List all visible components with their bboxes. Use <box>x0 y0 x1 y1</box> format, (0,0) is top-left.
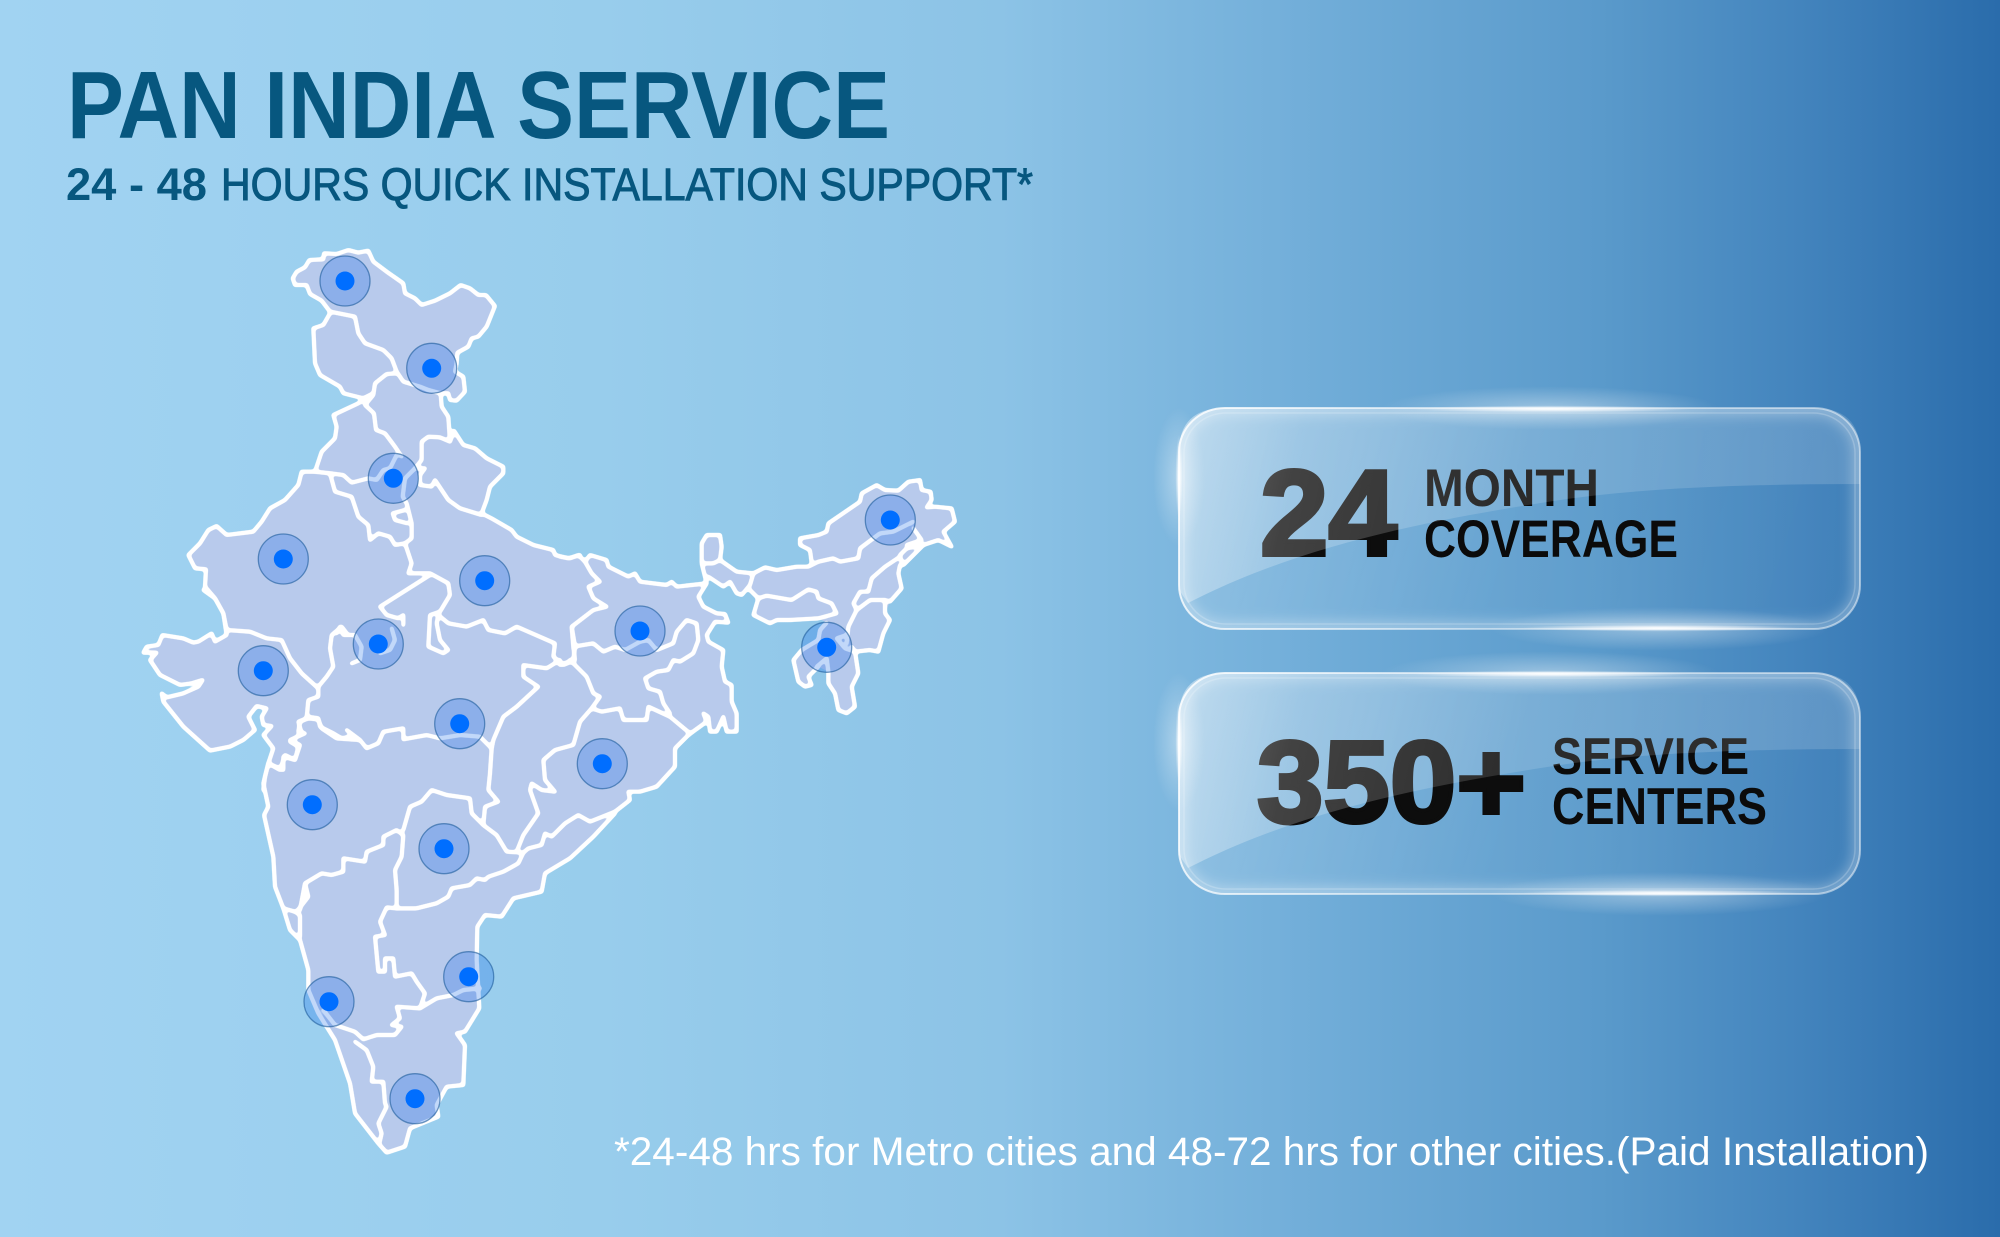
subtitle: HOURS QUICK INSTALLATION SUPPORT* <box>221 159 1033 210</box>
light flares <box>1153 651 1830 916</box>
state fills <box>143 250 955 1153</box>
title: PAN INDIA SERVICE <box>67 52 890 159</box>
inner border <box>1184 413 1855 624</box>
marker: Telangana <box>419 824 469 874</box>
centers label: SERVICE <box>1552 728 1749 786</box>
panel border <box>1179 673 1860 894</box>
marker: Chennai <box>444 952 494 1002</box>
card: 350+ service centers <box>1153 651 1860 916</box>
centers label: CENTERS <box>1552 778 1767 836</box>
marker: Arunachal <box>865 495 915 545</box>
coverage label <box>1424 459 1678 569</box>
marker: Uttar Pradesh <box>460 556 510 606</box>
marker: Northeast hills <box>802 622 852 672</box>
glass panel body <box>1179 673 1860 894</box>
marker: Maharashtra <box>287 780 337 830</box>
map of India <box>143 250 955 1153</box>
card: 24 month coverage <box>1153 386 1860 651</box>
marker: Madhya Pradesh <box>435 699 485 749</box>
subtitle: 24 - 48 <box>66 159 207 210</box>
coverage label: COVERAGE <box>1424 510 1678 569</box>
glass reflection <box>1179 408 1860 603</box>
panel inner glow <box>1179 673 1860 894</box>
marker: Bihar <box>615 606 665 656</box>
centers label <box>1552 728 1767 836</box>
marker: Tamil Nadu <box>390 1074 440 1124</box>
panel border <box>1179 408 1860 629</box>
marker: Odisha <box>577 739 627 789</box>
state borders <box>143 250 955 1153</box>
marker: Gujarat <box>238 646 288 696</box>
marker: Karnataka coast <box>304 977 354 1027</box>
panel inner glow <box>1179 408 1860 629</box>
glass panel body <box>1179 408 1860 629</box>
coverage label: MONTH <box>1424 459 1599 518</box>
light flares <box>1153 386 1830 651</box>
marker: Himachal <box>407 343 457 393</box>
centers number: 350+ <box>1257 717 1526 847</box>
service location markers <box>238 256 915 1124</box>
coverage number: 24 <box>1260 445 1397 581</box>
marker: Delhi <box>368 453 418 503</box>
inner border <box>1184 678 1855 889</box>
marker: Indore region <box>353 619 403 669</box>
glass reflection <box>1179 673 1860 868</box>
marker: Rajasthan <box>258 534 308 584</box>
marker: Jammu and Kashmir <box>320 256 370 306</box>
footnote: *24-48 hrs for Metro cities and 48-72 hrs for other cities.(Paid Installation) <box>614 1130 1929 1174</box>
